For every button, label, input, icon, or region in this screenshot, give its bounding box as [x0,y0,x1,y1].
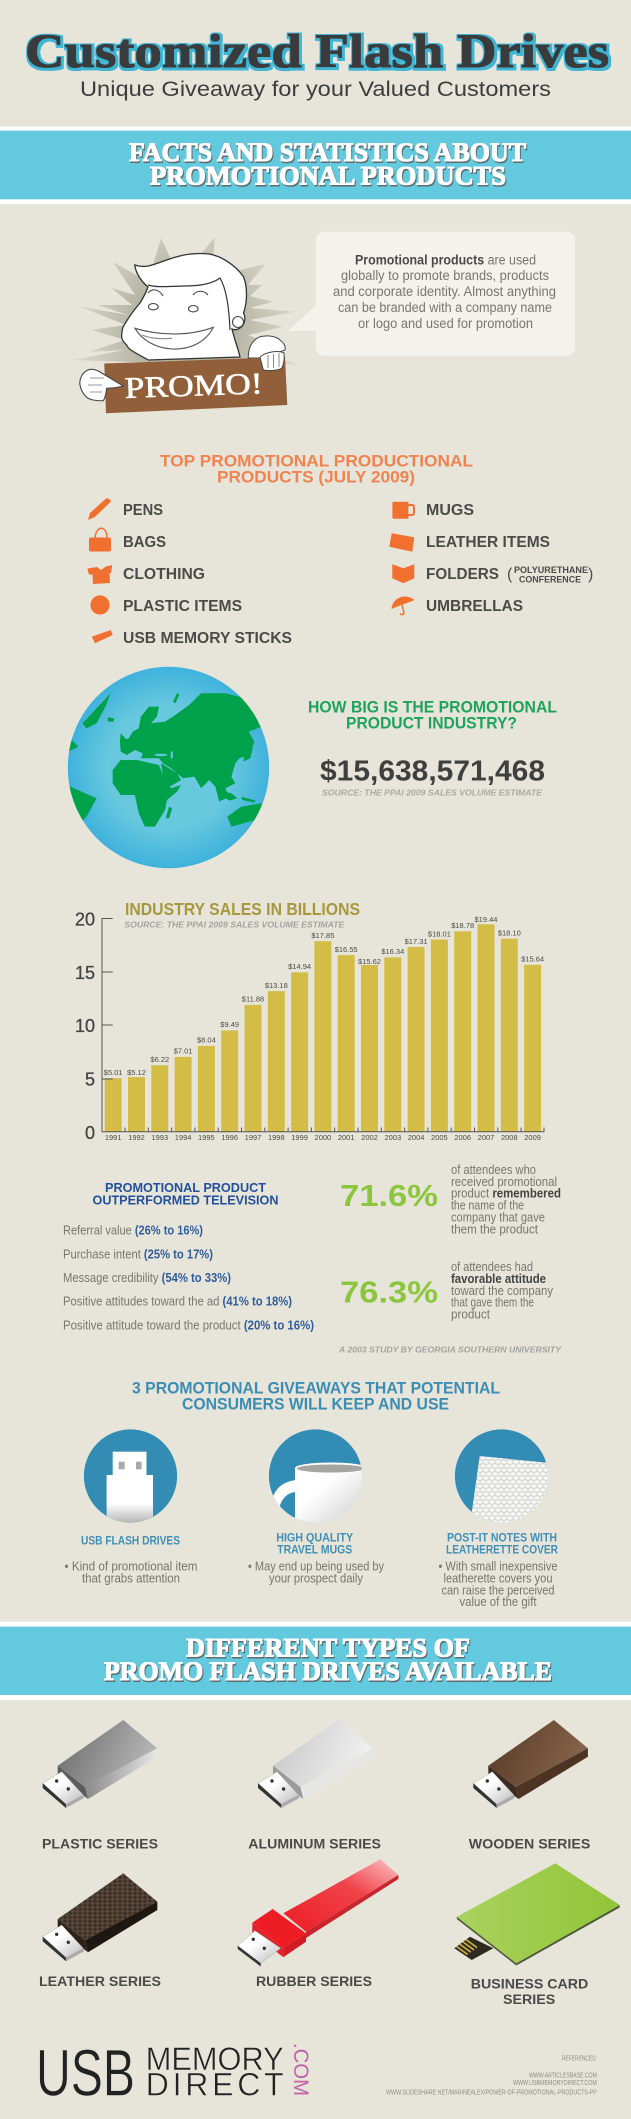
comparison list: Referral value (26% to 16%) [63,1223,203,1238]
callout text [333,252,556,331]
y axis labels: 15 [75,963,95,983]
description: • With small inexpensive [438,1560,558,1574]
icon: usb stick [92,630,113,643]
bar value labels: $17.85 [311,931,334,940]
folders: ) [588,566,593,583]
y axis labels: 20 [75,910,95,930]
label [471,1976,589,2007]
chart title: INDUSTRY SALES IN BILLIONS [125,899,360,919]
giveaway: usb flash drives [64,1429,198,1586]
callout text: or logo and used for promotion [358,316,533,331]
drive [238,1859,398,1966]
heading: OUTPERFORMED TELEVISION [92,1192,278,1207]
bar chart: industry sales in billions [75,899,544,1143]
heading: how big is the industry: PRODUCT INDUSTRY? [346,713,517,732]
bar value labels: $13.18 [265,981,288,990]
description: • Kind of promotional item [64,1560,198,1574]
label: LEATHER SERIES [39,1974,161,1989]
label [446,1530,558,1556]
icon: mug [269,1429,367,1528]
year labels: 2002 [361,1133,378,1142]
heading: top promotional products: PRODUCTS (JULY 2009) [217,468,415,487]
plastic items: PLASTIC ITEMS [123,598,242,615]
description [64,1560,198,1586]
year labels: 2001 [338,1133,355,1142]
year labels: 2004 [408,1133,424,1142]
sign text: PROMO! [124,367,263,405]
year labels: 1994 [175,1133,191,1142]
folders: FOLDERS [426,566,499,583]
right hand fingers [260,352,284,371]
bar value labels: $7.01 [174,1047,192,1056]
bar value labels: $18.10 [498,928,521,937]
references: WWW.ARTICLESBASE.COM [529,2072,597,2079]
card drive [454,1863,620,1966]
title: Customized Flash Drives [25,25,609,78]
label: ALUMINUM SERIES [248,1836,381,1851]
y axis labels: 0 [85,1123,95,1143]
logo: usb memory direct [36,2036,312,2110]
references [386,2056,597,2097]
heading: how big is the industry [308,698,557,732]
callout text: can be branded with a company name [338,300,552,315]
bar value labels: $18.78 [451,921,474,930]
heading: 3 promotional giveaways [132,1378,500,1413]
heading: top promotional products [160,452,473,487]
stat description: of attendees who [451,1162,536,1177]
bar value labels: $16.34 [381,947,404,956]
description: that grabs attention [82,1572,180,1586]
banner heading [104,1634,552,1686]
label: TRAVEL MUGS [277,1542,352,1556]
year labels: 2005 [431,1133,448,1142]
banner heading: FACTS AND STATISTICS ABOUT [129,138,526,167]
year labels: 1998 [268,1133,285,1142]
folders: ( [507,566,513,583]
description: • May end up being used by [248,1560,385,1574]
icon: bag [89,528,111,552]
drive [258,1720,373,1808]
giveaway: travel mugs [248,1429,385,1586]
hairline and features [135,278,244,349]
description [438,1560,558,1609]
heading: top promotional products: TOP PROMOTIONAL PRODUCTIONAL [160,452,473,471]
stat description: that gave them the [451,1295,534,1310]
year labels: 1993 [151,1133,168,1142]
stat: 76.3 percent [340,1259,553,1322]
list: top products [87,498,593,647]
logo: usb memory direct: DIRECT [146,2067,284,2103]
banner heading: DIFFERENT TYPES OF [186,1634,470,1663]
product: business card series [454,1863,620,2007]
bar value labels [104,915,544,1077]
right arm [248,336,285,358]
label: POST-IT NOTES WITH [447,1530,557,1544]
bar value labels: $5.01 [104,1068,123,1077]
product: leather series [39,1873,161,1989]
references: REFERENCES: [562,2056,597,2063]
description: your prospect daily [269,1572,364,1586]
drive [43,1873,157,1961]
heading: how big is the industry: HOW BIG IS THE PROMOTIONAL [308,698,557,717]
stat description [451,1259,553,1322]
folders: CONFERENCE [519,574,581,584]
giveaway: post-it notes [438,1429,558,1609]
icon: leatherette cover [455,1429,550,1525]
icon: mug [392,502,414,519]
stat description: toward the company [451,1283,553,1298]
label: RUBBER SERIES [256,1974,372,1989]
study note: A 2003 STUDY BY GEORGIA SOUTHERN UNIVERSITY [338,1345,562,1355]
stat description [451,1162,561,1236]
y axis labels: 10 [75,1016,95,1036]
banner heading [129,138,526,190]
stat: 71.6 percent: 71.6% [340,1178,438,1213]
stat: 71.6 percent [340,1162,561,1236]
year labels: 1999 [291,1133,308,1142]
year labels: 2003 [384,1133,401,1142]
subtitle: Unique Giveaway for your Valued Customers [80,78,551,101]
icon: pen [88,498,111,520]
stat description: company that gave [451,1209,545,1224]
sign [104,357,287,413]
stat: 76.3 percent: 76.3% [340,1275,438,1310]
leather items: LEATHER ITEMS [426,534,550,551]
product: aluminum series [248,1720,381,1851]
heading: 3 promotional giveaways: 3 PROMOTIONAL GIVEAWAYS THAT POTENTIAL [132,1378,500,1397]
chart source: SOURCE: THE PPAI 2009 SALES VOLUME ESTIMATE [124,920,345,930]
bar value labels: $5.12 [127,1068,146,1077]
callout text: Promotional products are used [355,252,536,267]
bar value labels: $19.44 [475,915,497,924]
label: SERIES [503,1992,555,2007]
product: plastic series [42,1720,158,1851]
year labels: 2008 [501,1133,518,1142]
comparison list: Positive attitude toward the product (20% to 16%) [63,1317,314,1332]
drive [473,1720,588,1808]
bar value labels: $8.04 [197,1036,216,1045]
bars [105,924,541,1132]
industry total: $15,638,571,468 [320,756,545,788]
folders: POLYURETHANE [514,565,588,575]
comparison list: Purchase intent (25% to 17%) [63,1246,213,1261]
umbrellas: UMBRELLAS [426,598,523,615]
description: can raise the perceived [442,1584,555,1598]
description [248,1560,385,1586]
banner heading: PROMO FLASH DRIVES AVAILABLE [104,1657,552,1686]
heading [92,1180,278,1207]
starburst behind mascot [73,237,300,365]
stat description: of attendees had [451,1259,533,1274]
clothing: CLOTHING [123,566,205,583]
globe [66,667,270,868]
product: rubber series [238,1859,398,1989]
bar value labels: $6.22 [150,1055,169,1064]
bar value labels: $11.88 [242,995,264,1004]
description: leatherette covers you [444,1572,553,1586]
label [276,1530,353,1556]
icon: usb flash drive [84,1429,177,1523]
source note: SOURCE: THE PPAI 2009 SALES VOLUME ESTIMATE [322,788,542,798]
label: LEATHERETTE COVER [446,1542,558,1556]
callout: promotional products description [288,232,575,356]
banner: facts and statistics [0,127,631,204]
icon: t-shirt [87,565,112,584]
bar value labels: $9.49 [220,1020,239,1029]
bar value labels: $17.31 [405,937,428,946]
label: PLASTIC SERIES [42,1836,158,1851]
bar value labels: $18.01 [428,929,451,938]
bar value labels: $14.94 [288,962,311,971]
mugs: MUGS [426,502,474,519]
comparison list: Message credibility (54% to 33%) [63,1270,231,1285]
pens: PENS [123,502,163,519]
drive [43,1720,157,1808]
icon: leather item [389,533,414,552]
logo: usb memory direct: MEMORY [146,2041,284,2077]
year labels: 2006 [454,1133,471,1142]
icon: folder [392,564,414,583]
continents [66,693,270,833]
references: WWW.USBMEMORYDIRECT.COM [513,2080,597,2087]
label: WOODEN SERIES [469,1836,590,1851]
year labels: 2000 [315,1133,331,1142]
panel: outperformed television [63,1180,314,1332]
stat description: the name of the [451,1198,524,1213]
heading: PROMOTIONAL PRODUCT [105,1180,266,1195]
icon: umbrella [392,597,414,615]
stat description: them the product [451,1221,538,1236]
label: BUSINESS CARD [471,1976,589,1991]
comparison list: Positive attitudes toward the ad (41% to 18%) [63,1294,292,1309]
callout text: globally to promote brands, products [341,268,549,283]
banner heading: PROMOTIONAL PRODUCTS [150,161,506,190]
year labels: 2007 [478,1133,494,1142]
y axis labels: 5 [85,1070,95,1090]
bar value labels: $16.55 [335,945,358,954]
description: value of the gift [460,1595,537,1609]
comparison list [63,1223,314,1332]
year labels [105,1133,541,1142]
stat description: product [451,1307,490,1322]
icon: circle [90,595,110,615]
year labels: 2009 [524,1133,541,1142]
y axis labels [75,910,95,1143]
year labels: 1991 [105,1133,122,1142]
year labels: 1996 [221,1133,238,1142]
banner: different types [0,1622,631,1700]
label: HIGH QUALITY [276,1530,353,1544]
bags: BAGS [123,534,166,551]
heading: 3 promotional giveaways: CONSUMERS WILL KEEP AND USE [182,1394,449,1413]
bar value labels: $15.62 [358,957,381,966]
stat description: favorable attitude [451,1271,546,1286]
year labels: 1997 [245,1133,261,1142]
bar value labels: $15.64 [521,955,544,964]
label: USB FLASH DRIVES [81,1533,180,1547]
year labels: 1992 [128,1133,145,1142]
stat description: product remembered [451,1186,561,1201]
head [122,253,247,360]
logo suffix: .COM [289,2043,312,2096]
pointing hand [80,369,123,401]
callout text: and corporate identity. Almost anything [333,284,556,299]
stat description: received promotional [451,1174,557,1189]
illustration: promo mascot [73,237,300,413]
year labels: 1995 [198,1133,215,1142]
logo: usb memory direct: USB [36,2036,135,2110]
product: wooden series [469,1720,590,1851]
folders [426,565,593,584]
usb memory sticks: USB MEMORY STICKS [123,630,292,647]
